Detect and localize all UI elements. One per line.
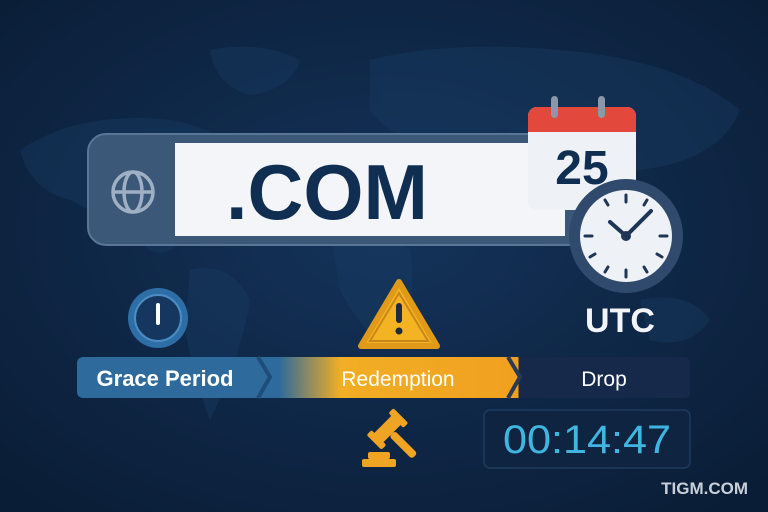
watermark: TIGM.COM — [661, 479, 748, 498]
UTC label: UTC — [585, 302, 655, 340]
countdown display: 00:14:47 — [503, 418, 671, 462]
icon: globe — [113, 172, 153, 212]
stage timeline bar: Drop — [581, 368, 627, 391]
domain text: .COM — [226, 148, 428, 236]
stage timeline bar — [77, 357, 690, 398]
stage timeline bar: Redemption — [341, 368, 455, 391]
icon: warning triangle — [361, 282, 437, 346]
icon: gavel — [362, 408, 428, 470]
icon: grace period timer — [128, 288, 188, 348]
stage timeline bar: Grace Period — [97, 366, 233, 391]
world map background — [20, 47, 740, 420]
search bar — [88, 134, 588, 245]
countdown display — [484, 410, 690, 468]
icon: calendar — [528, 96, 636, 210]
icon: clock — [569, 179, 683, 293]
icon: calendar: 25 — [555, 142, 609, 195]
